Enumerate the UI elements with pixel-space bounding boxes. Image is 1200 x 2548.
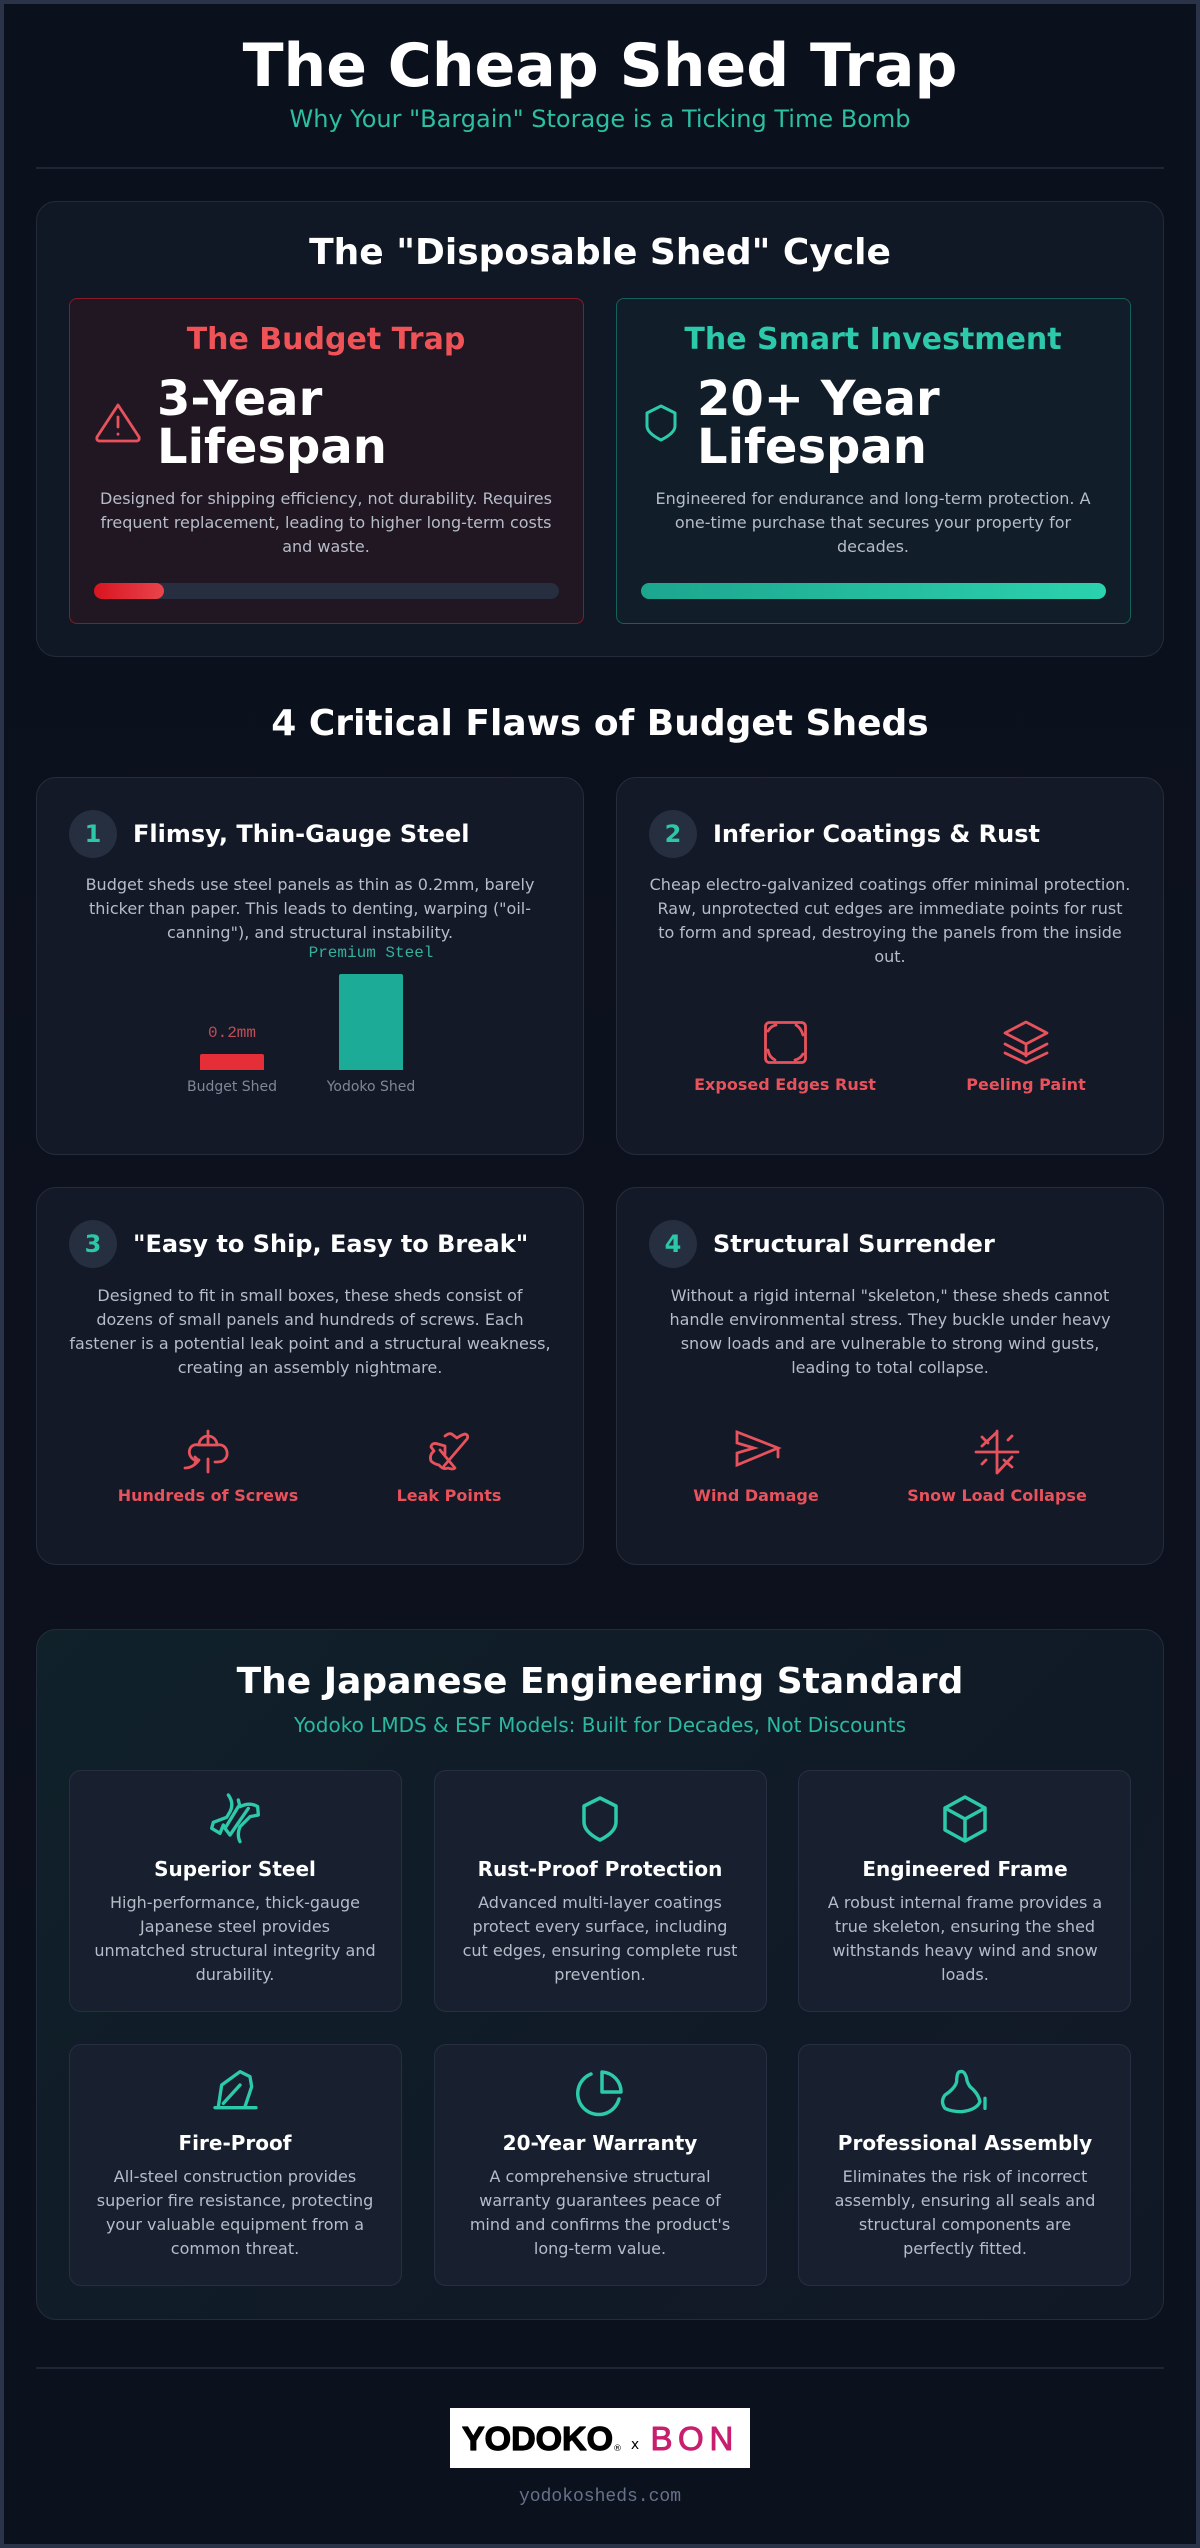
icon: leak points — [429, 1432, 470, 1470]
panel: the smart investment — [616, 298, 1131, 624]
title: The Cheap Shed Trap — [243, 31, 957, 101]
text: 20-year warranty — [470, 2167, 730, 2258]
icon: rust-proof shield — [582, 1796, 618, 1842]
flaw 3 text: dozens of small panels and hundreds of screws. Each — [96, 1310, 524, 1329]
text: smart investment description: Engineered for endurance and long-term protection. A — [655, 489, 1091, 508]
label: wind damage: Wind Damage — [693, 1486, 819, 1505]
flaw 2 text: to form and spread, destroying the panels from the inside — [658, 923, 1122, 942]
logo: yodoko x bon: B — [650, 2420, 673, 2457]
text: rust-proof protection: protect every surface, including — [473, 1917, 727, 1936]
subtitle: yodoko models: Yodoko LMDS & ESF Models: Built for Decades, Not Discounts — [294, 1713, 906, 1737]
flaw 1 title: Flimsy, Thin-Gauge Steel — [133, 820, 469, 848]
header divider — [36, 167, 1164, 169]
text: superior steel: unmatched structural integrity and — [94, 1941, 376, 1960]
text: smart investment description — [655, 489, 1091, 556]
heading: the smart investment: The Smart Investment — [684, 322, 1062, 357]
title: engineered frame: Engineered Frame — [862, 1857, 1068, 1881]
icon: snow load collapse — [974, 1430, 1020, 1474]
bar chart: steel thickness — [187, 944, 433, 1095]
logo: yodoko x bon: YODOKO — [462, 2420, 613, 2457]
text: professional assembly: perfectly fitted. — [903, 2239, 1027, 2258]
flaw 2 text: out. — [874, 947, 906, 966]
icon: shield — [646, 404, 676, 442]
badge: 3 — [69, 1220, 117, 1268]
badge: 2: 2 — [665, 820, 681, 848]
text: 20-year warranty: warranty guarantees peace of — [479, 2191, 721, 2210]
flaw 4 text — [669, 1286, 1111, 1377]
flaw 4 title: Structural Surrender — [713, 1230, 995, 1258]
text: professional assembly — [835, 2167, 1095, 2258]
flaw 3 text: creating an assembly nightmare. — [178, 1358, 442, 1377]
flaw 4 text: leading to total collapse. — [791, 1358, 989, 1377]
text: rust-proof protection: prevention. — [554, 1965, 646, 1984]
card: superior steel — [69, 1770, 402, 2012]
text: fire-proof — [97, 2167, 373, 2258]
title: fire-proof: Fire-Proof — [179, 2131, 291, 2155]
heading: japanese engineering standard: The Japanese Engineering Standard — [237, 1661, 963, 1702]
card: engineered frame — [798, 1770, 1131, 2012]
badge: 1: 1 — [85, 820, 101, 848]
panel: flaw 2 — [616, 777, 1164, 1155]
panel: flaw 4 — [616, 1187, 1164, 1565]
text: budget trap description: and waste. — [282, 537, 370, 556]
text: engineered frame — [828, 1893, 1102, 1984]
flaw 3 text — [69, 1286, 551, 1377]
icon: fire-proof — [213, 2070, 258, 2110]
text: engineered frame: A robust internal frame provides a — [828, 1893, 1102, 1912]
stat: 20+ year lifespan: 20+ Year — [697, 371, 940, 427]
flaw 2 title: Inferior Coatings & Rust — [713, 820, 1040, 848]
icon: superior steel — [210, 1793, 260, 1844]
text: superior steel — [94, 1893, 376, 1984]
panel: flaw 3 — [36, 1187, 584, 1565]
text: fire-proof: All-steel construction provides — [114, 2167, 356, 2186]
text: rust-proof protection: cut edges, ensuring complete rust — [463, 1941, 737, 1960]
text: professional assembly: assembly, ensuring all seals and — [835, 2191, 1095, 2210]
heading: the budget trap: The Budget Trap — [187, 322, 465, 357]
footer divider — [36, 2367, 1164, 2369]
text: smart investment description: one-time purchase that secures your property for — [675, 513, 1071, 532]
flaw 1 text: thicker than paper. This leads to denting, warping ("oil- — [89, 899, 531, 918]
stat: 3-year lifespan — [157, 371, 387, 475]
badge: 4 — [649, 1220, 697, 1268]
text: engineered frame: loads. — [941, 1965, 989, 1984]
panel: the budget trap — [69, 298, 584, 624]
flaw 3 title: "Easy to Ship, Easy to Break" — [133, 1230, 528, 1258]
icon: assembly — [940, 2070, 987, 2114]
card: fire-proof — [69, 2044, 402, 2286]
logo: yodoko x bon: N — [710, 2420, 733, 2457]
badge: 2 — [649, 810, 697, 858]
text: budget trap description — [100, 489, 552, 556]
icon: wind damage — [736, 1430, 782, 1468]
text: superior steel: durability. — [196, 1965, 274, 1984]
panel: disposable shed cycle — [36, 201, 1164, 657]
text: professional assembly: Eliminates the risk of incorrect — [843, 2167, 1087, 2186]
stat: 20+ year lifespan — [697, 371, 940, 475]
label: premium steel: Premium Steel — [309, 944, 433, 962]
flaw 1 text: canning"), and structural instability. — [167, 923, 453, 942]
text: fire-proof: superior fire resistance, protecting — [97, 2191, 373, 2210]
label: 0.2mm: 0.2mm — [208, 1024, 256, 1042]
card: rust-proof protection — [434, 1770, 767, 2012]
heading: critical flaws: 4 Critical Flaws of Budget Sheds — [271, 703, 929, 744]
icon: warranty pie — [576, 2070, 623, 2116]
flaw 3 text: fastener is a potential leak point and a structural weakness, — [69, 1334, 551, 1353]
stat: 20+ year lifespan: Lifespan — [697, 419, 927, 475]
logo: yodoko x bon: x — [631, 2437, 639, 2453]
icon: cube frame — [943, 1795, 987, 1843]
badge: 1 — [69, 810, 117, 858]
subtitle: Why Your "Bargain" Storage is a Ticking Time Bomb — [290, 105, 910, 133]
bar: smart lifespan — [641, 583, 1106, 599]
logo: yodoko x bon: ® — [613, 2444, 622, 2454]
text: professional assembly: structural components are — [859, 2215, 1071, 2234]
stat: 3-year lifespan: 3-Year — [157, 371, 322, 427]
text: fire-proof: your valuable equipment from a — [106, 2215, 364, 2234]
card: professional assembly — [798, 2044, 1131, 2286]
title: 20-year warranty: 20-Year Warranty — [503, 2131, 697, 2155]
text: superior steel: Japanese steel provides — [140, 1917, 330, 1936]
label: budget shed: Budget Shed — [187, 1079, 277, 1095]
label: peeling paint: Peeling Paint — [966, 1075, 1086, 1094]
logo: yodoko x bon — [450, 2408, 750, 2468]
text: engineered frame: withstands heavy wind and snow — [832, 1941, 1098, 1960]
bar: yodoko — [339, 974, 403, 1070]
text: budget trap description: frequent replacement, leading to higher long-term costs — [100, 513, 552, 532]
text: 20-year warranty: A comprehensive structural — [489, 2167, 711, 2186]
panel: flaw 1 — [36, 777, 584, 1155]
text: engineered frame: true skeleton, ensuring the shed — [835, 1917, 1095, 1936]
icon: screws — [184, 1430, 228, 1474]
flaw 2 text: Raw, unprotected cut edges are immediate points for rust — [658, 899, 1122, 918]
label: leak points: Leak Points — [397, 1486, 501, 1505]
badge: 4: 4 — [665, 1230, 681, 1258]
card: 20-year warranty — [434, 2044, 767, 2286]
label: yodoko shed: Yodoko Shed — [327, 1079, 415, 1095]
panel: japanese engineering standard — [36, 1629, 1164, 2320]
bar: budget lifespan — [94, 583, 559, 599]
website url: yodokosheds.com — [519, 2487, 681, 2507]
flaw 3 text: Designed to fit in small boxes, these sheds consist of — [97, 1286, 523, 1305]
flaw 1 text: Budget sheds use steel panels as thin as 0.2mm, barely — [86, 875, 534, 894]
icon: peeling paint — [1004, 1020, 1048, 1064]
logo: yodoko x bon: O — [678, 2420, 704, 2457]
text: fire-proof: common threat. — [171, 2239, 299, 2258]
flaw 2 text: Cheap electro-galvanized coatings offer minimal protection. — [650, 875, 1130, 894]
text: budget trap description: Designed for shipping efficiency, not durability. Requires — [100, 489, 552, 508]
title: rust-proof protection: Rust-Proof Protection — [478, 1857, 722, 1881]
title: superior steel: Superior Steel — [154, 1857, 316, 1881]
stat: 3-year lifespan: Lifespan — [157, 419, 387, 475]
text: rust-proof protection — [463, 1893, 737, 1984]
flaw 2 text — [650, 875, 1130, 966]
flaw 4 text: handle environmental stress. They buckle under heavy — [669, 1310, 1111, 1329]
title: professional assembly: Professional Assembly — [838, 2131, 1092, 2155]
icon: exposed edges — [764, 1021, 807, 1064]
text: smart investment description: decades. — [837, 537, 909, 556]
text: 20-year warranty: long-term value. — [534, 2239, 666, 2258]
label: snow load collapse: Snow Load Collapse — [907, 1486, 1087, 1505]
bar: budget — [200, 1054, 264, 1070]
text: 20-year warranty: mind and confirms the product's — [470, 2215, 730, 2234]
flaw 1 text — [86, 875, 534, 942]
label: hundreds of screws: Hundreds of Screws — [118, 1486, 298, 1505]
heading: disposable shed cycle: The "Disposable Shed" Cycle — [309, 232, 891, 273]
flaw 4 text: snow loads and are vulnerable to strong wind gusts, — [681, 1334, 1099, 1353]
text: rust-proof protection: Advanced multi-layer coatings — [478, 1893, 722, 1912]
badge: 3: 3 — [85, 1230, 101, 1258]
text: superior steel: High-performance, thick-gauge — [110, 1893, 360, 1912]
flaw 4 text: Without a rigid internal "skeleton," these sheds cannot — [671, 1286, 1109, 1305]
label: exposed edges rust: Exposed Edges Rust — [694, 1075, 876, 1094]
icon: warning triangle — [95, 404, 141, 442]
